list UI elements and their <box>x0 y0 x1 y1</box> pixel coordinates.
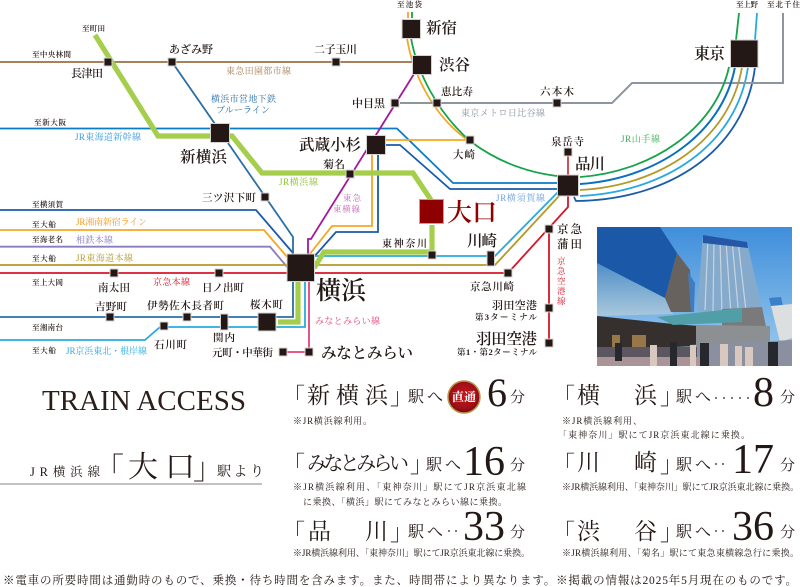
badge: 直通 <box>448 381 480 413</box>
access: みなとみらい 16分: ※JR横浜線利用、「東神奈川」駅にてJR京浜東北線 <box>293 481 526 492</box>
access: 川崎 17分: ※JR横浜線利用、「東神奈川」駅にてJR京浜東北線に乗換。 <box>562 481 799 492</box>
station: 菊名 <box>323 157 354 178</box>
access: 川崎 17分: 川 <box>577 450 600 475</box>
subtitle: JR横浜線「大口」駅より: 」 <box>193 444 223 488</box>
title: TRAIN ACCESS: TRAIN ACCESS <box>42 385 246 417</box>
access: 横浜 8分: 浜 <box>634 383 658 408</box>
access: 品川 33分: 」 <box>390 514 413 547</box>
station: 羽田空港第1・第2ターミナル <box>457 329 553 357</box>
station: 京急川崎: 京急川崎 <box>470 280 514 293</box>
destination labels: 至北千住 <box>767 0 800 9</box>
station: 恵比寿: 恵比寿 <box>441 85 474 98</box>
station: 羽田空港第1・第2ターミナル: 羽田空港 <box>476 329 537 348</box>
station: 南太田: 南太田 <box>98 281 130 294</box>
station: 泉岳寺 <box>551 135 584 156</box>
access: 新横浜 6分: 駅へ <box>407 388 443 406</box>
access: 新横浜 6分: 新 <box>307 383 330 408</box>
line: JR Yokohama: JR横浜線 <box>279 176 318 187</box>
access: 横浜 8分: ※JR横浜線利用、 <box>562 415 642 426</box>
destination labels: 至中央林間 <box>32 49 72 59</box>
access: みなとみらい 16分: 駅へ <box>425 456 461 474</box>
station: 京急蒲田 <box>545 222 582 251</box>
access: 新横浜 6分: 6 <box>487 370 507 415</box>
destination labels: 至大船 <box>32 219 56 229</box>
station: 石川町: 石川町 <box>154 338 188 351</box>
line: Tokyu Toyoko: 東横線 <box>333 204 360 214</box>
access: 品川 33分: 品 <box>308 519 331 544</box>
access: 新横浜 6分: ※JR横浜線利用。 <box>293 415 372 426</box>
station: 東神奈川: 東神奈川 <box>382 237 427 250</box>
access: 川崎 17分: 「 <box>552 446 575 479</box>
access: 渋谷 36分: 分 <box>780 524 795 541</box>
line: Keikyu airport <box>549 229 566 343</box>
station: あざみ野 <box>168 43 213 66</box>
station: 京急蒲田: 京急 <box>557 222 582 236</box>
access: 横浜 8分: 8 <box>753 370 774 416</box>
station: 中目黒 <box>352 96 399 110</box>
station: 石川町 <box>154 322 188 351</box>
line: Shonan-Shinjuku: JR湘南新宿ライン <box>76 216 147 227</box>
line: JR Yokohama <box>95 35 432 322</box>
destination labels: 至横須賀 <box>32 199 64 209</box>
access: 新横浜 6分: 横 <box>336 383 359 408</box>
destination labels: 至大船 <box>32 345 56 355</box>
access: 川崎 17分: 崎 <box>634 450 657 475</box>
station: 吉野町 <box>95 300 128 321</box>
station: 大崎 <box>453 136 476 161</box>
access: みなとみらい 16分: 「 <box>282 446 305 479</box>
access: 横浜 8分: 駅へ <box>675 388 711 406</box>
station: 長津田 <box>71 58 112 80</box>
access: みなとみらい 16分: 16 <box>463 439 505 485</box>
station: 元町・中華街: 元町・中華街 <box>212 346 274 359</box>
destination labels: 至大船 <box>32 253 56 263</box>
station: みなとみらい: みなとみらい <box>321 344 413 362</box>
station: あざみ野: あざみ野 <box>169 43 213 56</box>
station: 京急川崎 <box>470 269 514 293</box>
access: 新横浜 6分 <box>282 370 525 426</box>
station: 羽田空港第3ターミナル: 第3ターミナル <box>475 312 537 322</box>
line: Tokyu Toyoko <box>308 74 414 256</box>
line: Shonan-Shinjuku <box>0 12 466 258</box>
line: Blue Line: 横浜市営地下鉄 <box>211 93 276 104</box>
station: 渋谷: 渋谷 <box>439 56 470 74</box>
access: 新横浜 6分: 分 <box>510 389 525 406</box>
access: 品川 33分 <box>282 504 530 558</box>
station: 大崎: 大崎 <box>453 148 476 161</box>
line: Sotetsu <box>0 234 288 268</box>
photo: Yokohama station <box>597 227 792 366</box>
access: 渋谷 36分 <box>552 504 799 558</box>
line: Keikyu airport: 空 <box>557 276 566 286</box>
access: みなとみらい 16分: 分 <box>510 457 525 474</box>
line: Yamanote: JR山手線 <box>621 133 660 144</box>
line: Keikyu airport: 急 <box>557 266 566 276</box>
station: 新横浜 <box>180 124 230 166</box>
access: 品川 33分: 33 <box>463 504 505 550</box>
access: 渋谷 36分: 36 <box>732 504 774 550</box>
line: Tokaido main: JR東海道本線 <box>76 252 133 263</box>
line: Keikyu airport: 線 <box>557 296 566 306</box>
station: 武蔵小杉: 武蔵小杉 <box>299 135 361 154</box>
line: Yokosuka: JR横須賀線 <box>496 192 545 203</box>
access: 品川 33分: 「 <box>282 514 305 547</box>
station: 元町・中華街 <box>212 346 287 359</box>
station: 大口: 大口 <box>447 199 497 227</box>
destination labels: 至海老名 <box>32 234 63 244</box>
station: 川崎: 川崎 <box>467 231 497 250</box>
station: 関内: 関内 <box>213 331 235 344</box>
destination labels: 至上大岡 <box>32 277 64 287</box>
line: Minatomirai: みなとみらい線 <box>315 315 380 326</box>
subtitle: JR横浜線「大口」駅より: JR横浜線 <box>30 464 100 479</box>
line: Sotetsu: 相鉄本線 <box>76 234 113 245</box>
station: 吉野町: 吉野町 <box>95 300 128 313</box>
access: 横浜 8分: 「東神奈川」駅にてJR京浜東北線に乗換。 <box>558 429 750 440</box>
station: 伊勢佐木長者町 <box>147 299 224 321</box>
line: Hibiya: 東京メトロ日比谷線 <box>461 107 545 118</box>
access: 横浜 8分: 」 <box>660 378 683 411</box>
subtitle: JR横浜線「大口」駅より <box>0 442 264 488</box>
line: Yamanote <box>411 12 739 177</box>
station: 東京 <box>694 40 758 68</box>
station: 横浜: 横浜 <box>316 277 367 305</box>
access: 渋谷 36分: 谷 <box>634 519 657 544</box>
access: 渋谷 36分: 駅へ <box>675 523 711 541</box>
subtitle: JR横浜線「大口」駅より: 大 <box>128 442 158 486</box>
line: Tokyu Toyoko: 東急 <box>343 193 361 203</box>
footnote: ※電車の所要時間は通勤時のもので、乗換・待ち時間を含みます。また、時間帯により異なります。※掲載の情報は2025年5月現在のものです。 <box>3 573 797 587</box>
station: 大口 <box>420 199 497 227</box>
line: Sengakuji link <box>567 152 569 176</box>
badge: 直通: 直通 <box>452 389 476 404</box>
destination labels: 至池袋 <box>397 0 422 9</box>
access: みなとみらい 16分: みなとみらい <box>307 453 409 475</box>
line: Keikyu main <box>0 196 568 287</box>
destination labels: 至町田 <box>82 23 105 33</box>
access: 川崎 17分: 分 <box>780 457 795 474</box>
station: 桜木町: 桜木町 <box>250 298 284 311</box>
station: 二子玉川: 二子玉川 <box>314 43 357 56</box>
line: Tokyu Den-en-toshi: 東急田園都市線 <box>226 65 291 76</box>
line: Blue Line: ブルーライン <box>216 105 270 115</box>
line: Keikyu airport: 港 <box>557 286 566 296</box>
access: 品川 33分: ※JR横浜線利用、「東神奈川」駅にてJR京浜東北線に乗換。 <box>293 547 530 558</box>
station: 横浜 <box>287 254 367 305</box>
station: 品川 <box>558 155 605 196</box>
access: 新横浜 6分: 浜 <box>365 383 389 408</box>
station: 武蔵小杉 <box>299 135 386 154</box>
station: 京急蒲田: 蒲田 <box>557 237 582 251</box>
station: 東京: 東京 <box>694 45 725 63</box>
station: 新宿: 新宿 <box>426 18 457 37</box>
access: 新横浜 6分: 「 <box>282 378 305 411</box>
destination labels: 至上野 <box>736 0 758 9</box>
line: Tokyo blue <box>580 67 735 184</box>
destination labels: 至新大阪 <box>34 117 66 127</box>
station: 羽田空港第3ターミナル <box>475 298 553 322</box>
subtitle: JR横浜線「大口」駅より: 口 <box>165 442 195 486</box>
line: Tokaido Shinkansen: JR東海道新幹線 <box>75 131 141 142</box>
access: 川崎 17分: 駅へ <box>675 456 711 474</box>
station: 三ツ沢下町: 三ツ沢下町 <box>202 192 256 204</box>
station: 品川: 品川 <box>575 155 605 173</box>
destination labels: 至湘南台 <box>32 322 64 332</box>
subtitle: JR横浜線「大口」駅より: 駅より <box>216 464 264 480</box>
line: Keikyu main: 京急本線 <box>153 276 190 287</box>
station: 六本木: 六本木 <box>540 85 574 98</box>
line: Keikyu airport: 京 <box>557 256 566 266</box>
access: 横浜 8分: 分 <box>780 389 795 406</box>
line: Blue Line <box>0 62 293 317</box>
access: 横浜 8分: 「 <box>552 378 575 411</box>
access: 品川 33分: 分 <box>510 524 525 541</box>
station: 羽田空港第1・第2ターミナル: 第1・第2ターミナル <box>457 347 537 357</box>
access: みなとみらい 16分: 」 <box>410 446 433 479</box>
line: Minatomirai <box>283 280 380 352</box>
line: Tokaido Shinkansen <box>0 128 560 183</box>
destination labels <box>32 0 800 355</box>
access: 渋谷 36分: 渋 <box>577 519 601 544</box>
station: 菊名: 菊名 <box>323 157 345 171</box>
access: みなとみらい 16分 <box>282 439 526 507</box>
access: 品川 33分: 川 <box>365 519 388 544</box>
access: 川崎 17分 <box>552 437 799 492</box>
station: 泉岳寺: 泉岳寺 <box>551 135 584 148</box>
station: 羽田空港第3ターミナル: 羽田空港 <box>492 298 537 312</box>
station: 伊勢佐木長者町: 伊勢佐木長者町 <box>147 299 224 312</box>
station: 日ノ出町: 日ノ出町 <box>202 281 244 294</box>
access: 渋谷 36分: 」 <box>660 514 683 547</box>
access: 横浜 8分 <box>552 370 795 440</box>
station: 六本木 <box>540 85 574 107</box>
station: 東神奈川 <box>382 237 436 259</box>
line: Hibiya <box>400 13 783 118</box>
station: 南太田 <box>98 269 130 294</box>
access: 川崎 17分: 17 <box>732 437 774 483</box>
station: 新宿 <box>402 18 457 38</box>
station: 長津田: 長津田 <box>71 66 103 80</box>
access: みなとみらい 16分: に乗換、「横浜」駅にてみなとみらい線に乗換。 <box>303 496 507 507</box>
station: 川崎 <box>467 231 497 266</box>
access: 品川 33分: 駅へ <box>407 523 443 541</box>
station: 二子玉川 <box>314 43 357 66</box>
station: 関内 <box>213 314 235 344</box>
access: 渋谷 36分: ※JR横浜線利用、「菊名」駅にて東急東横線急行に乗換。 <box>562 547 799 558</box>
station: 新横浜: 新横浜 <box>180 148 227 166</box>
subtitle: JR横浜線「大口」駅より: 「 <box>94 444 124 488</box>
access: 渋谷 36分: 「 <box>552 514 575 547</box>
line: Keihin-Tohoku: JR京浜東北・根岸線 <box>66 345 147 356</box>
station: 中目黒: 中目黒 <box>352 96 386 110</box>
station: 日ノ出町 <box>202 269 244 294</box>
station: 渋谷 <box>412 56 470 74</box>
access: 川崎 17分: 」 <box>660 446 683 479</box>
station: 恵比寿 <box>433 85 474 107</box>
access: 新横浜 6分: 」 <box>390 378 413 411</box>
station: 桜木町 <box>250 298 284 331</box>
access: 横浜 8分: 横 <box>577 383 600 408</box>
